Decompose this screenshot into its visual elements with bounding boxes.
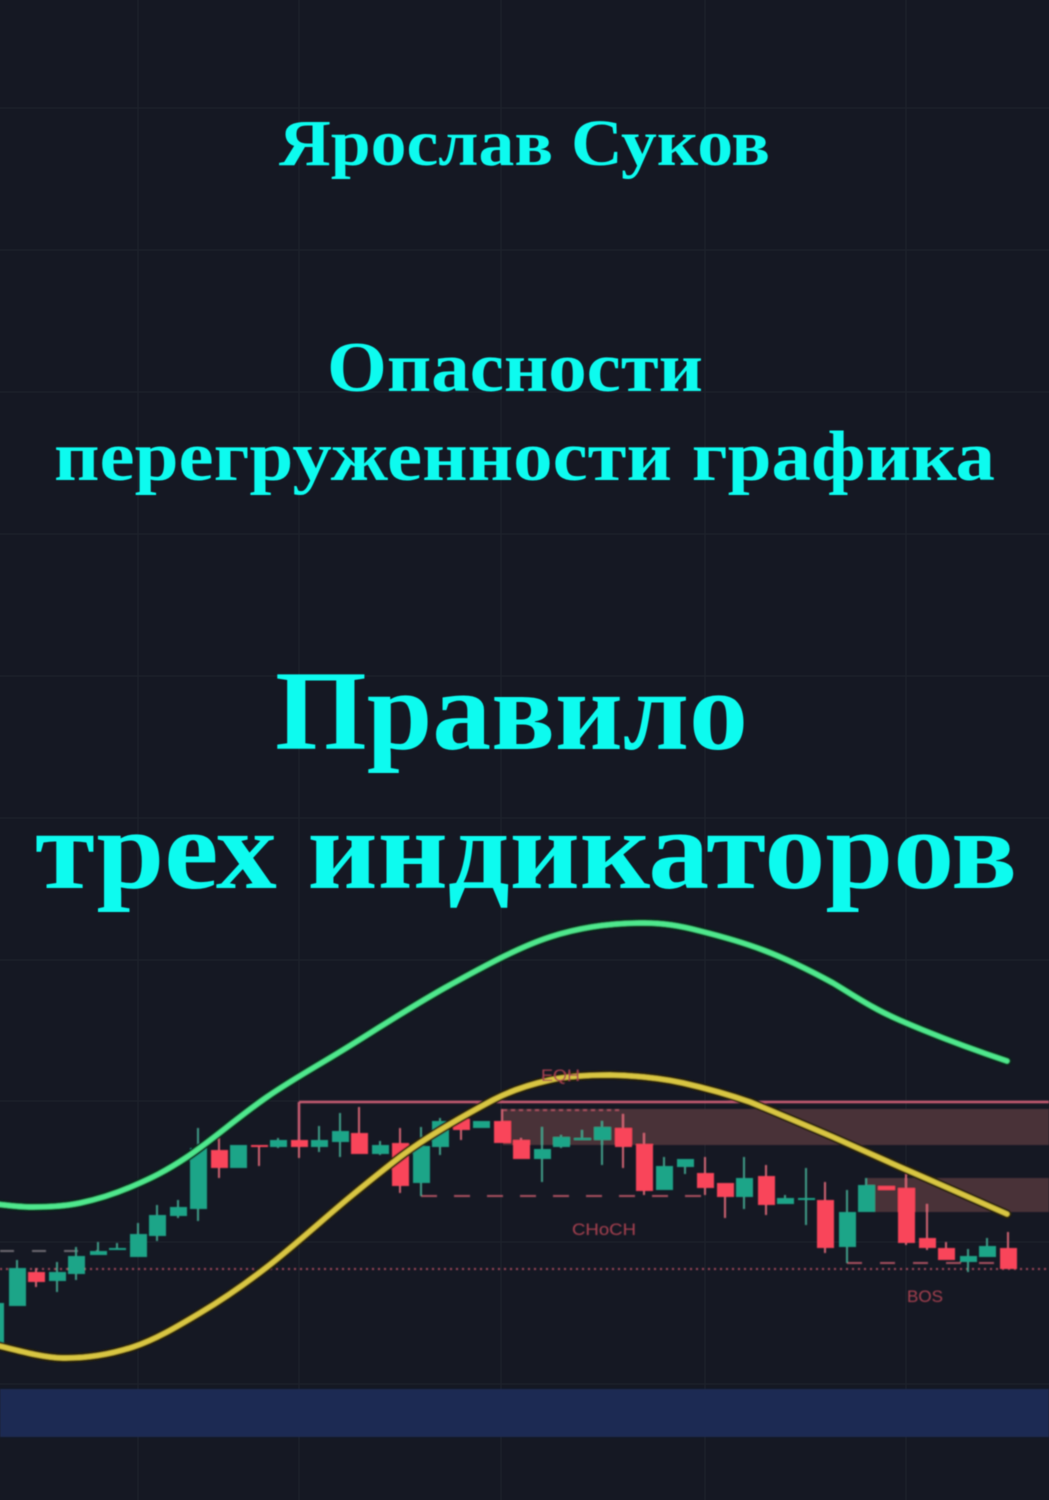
green moving average [0,923,1007,1207]
chart labels: BOS [907,1287,943,1306]
resistance line [299,1102,1049,1140]
dotted price line [0,1268,1049,1270]
blue volume band [0,1389,1049,1437]
main title [35,649,1017,913]
subtitle: Опасности [327,329,703,407]
red wicks [36,1107,1008,1287]
green bodies [0,1121,996,1343]
dashed structure levels [0,1110,1000,1263]
author name: Ярослав Суков [279,107,770,180]
supply zones [503,1109,1049,1212]
chart labels: CHoCH [572,1220,636,1239]
green wicks [17,1113,987,1306]
candlesticks [0,1107,1017,1343]
red bodies [28,1119,1017,1282]
subtitle [54,329,995,496]
chart labels [541,1066,943,1306]
subtitle: перегруженности графика [54,418,995,496]
main title: Правило [275,649,748,774]
chart labels: EQH [541,1066,580,1085]
main title: трех индикаторов [35,788,1017,913]
trading chart [0,923,1049,1437]
yellow moving average [0,1075,1007,1358]
